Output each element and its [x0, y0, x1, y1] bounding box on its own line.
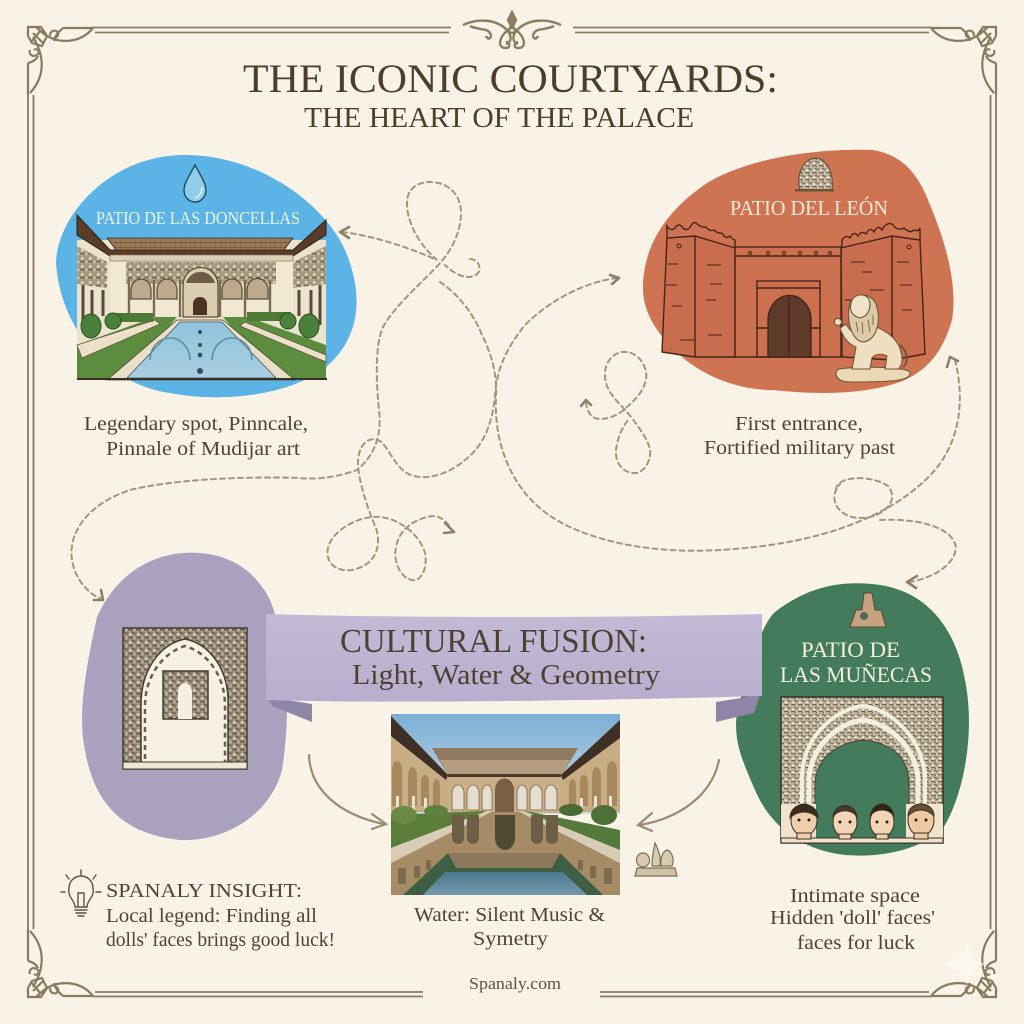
arrowheads: [94, 227, 958, 600]
terracotta blob: [643, 150, 953, 393]
patio name: PATIO DEL LEÓN: [730, 196, 888, 220]
photo: central courtyard: [391, 714, 620, 895]
panel: purple blob with arch: [82, 553, 287, 840]
text block: Munecas caption: Intimate space: [790, 885, 920, 907]
illustration: ornate arch: [123, 628, 247, 769]
icon: water drop: [184, 165, 206, 202]
blue blob: [56, 155, 357, 397]
callout: Spanaly insight: Local legend: Finding all: [106, 905, 317, 927]
icon: small arabesque: [635, 843, 677, 876]
title: THE ICONIC COURTYARDS:: [243, 56, 778, 101]
dashed connector paths: [71, 182, 960, 598]
water: reflected roof and sky: [403, 853, 603, 895]
patio name: [780, 637, 932, 687]
text block: Doncellas caption: Legendary spot, Pinncale,: [84, 413, 308, 435]
pool: [107, 320, 295, 380]
icon: light bulb: [61, 870, 101, 916]
side arcades: [77, 246, 326, 288]
sparkle mark: [946, 942, 988, 986]
callout: Spanaly insight: dolls' faces brings good luck!: [106, 929, 335, 951]
banner: cultural fusion: [266, 614, 762, 722]
illustration: courtyard with pool: [77, 215, 327, 380]
callout: Spanaly insight: [106, 880, 335, 951]
garden: [77, 317, 177, 380]
top ornament: [463, 12, 561, 48]
footer source: Spanaly.com: [469, 974, 561, 993]
text block: water caption: Symetry: [473, 928, 548, 950]
illustration: fortress gate: [662, 222, 925, 360]
illustration: arch with faces: [781, 697, 943, 843]
panel: Patio de las Doncellas: [56, 155, 357, 397]
green blob: [736, 583, 969, 856]
arrow: right to photo: [638, 760, 719, 831]
garden: [391, 811, 490, 848]
text block: Doncellas caption: Pinnale of Mudijar art: [106, 438, 300, 460]
title: THE HEART OF THE PALACE: [304, 102, 694, 134]
text block: Leon caption: Fortified military past: [704, 437, 895, 459]
pool: [391, 812, 620, 895]
illustration: lion statue: [834, 295, 910, 382]
patio name: LAS MUÑECAS: [780, 662, 932, 687]
text block: Munecas caption: [770, 885, 935, 954]
panel: Patio del Leon: [643, 150, 953, 393]
patio name: PATIO DE: [801, 637, 900, 662]
text block: Leon caption: [704, 413, 895, 459]
banner: cultural fusion: CULTURAL FUSION:: [340, 623, 647, 660]
arrow: left to photo: [309, 755, 386, 829]
text block: Leon caption: First entrance,: [735, 413, 863, 435]
text block: Doncellas caption: [84, 413, 308, 460]
icon: lion head: [795, 158, 834, 192]
title: [243, 56, 778, 134]
text block: Munecas caption: Hidden 'doll' faces': [770, 907, 935, 929]
lavender blob: [82, 553, 287, 840]
doll faces: [790, 804, 934, 839]
text block: Munecas caption: faces for luck: [797, 932, 915, 954]
banner: cultural fusion: Light, Water & Geometry: [352, 660, 660, 691]
callout: Spanaly insight: SPANALY INSIGHT:: [106, 880, 302, 902]
side wings: [391, 716, 448, 812]
patio name: PATIO DE LAS DONCELLAS: [96, 208, 300, 228]
icon: doll headdress: [850, 593, 886, 627]
text block: water caption: Water: Silent Music &: [414, 904, 605, 926]
text block: water caption: [414, 904, 605, 950]
central building: [432, 748, 578, 775]
reflected arches: [452, 815, 558, 850]
panel: Patio de las Munecas: [736, 583, 969, 856]
